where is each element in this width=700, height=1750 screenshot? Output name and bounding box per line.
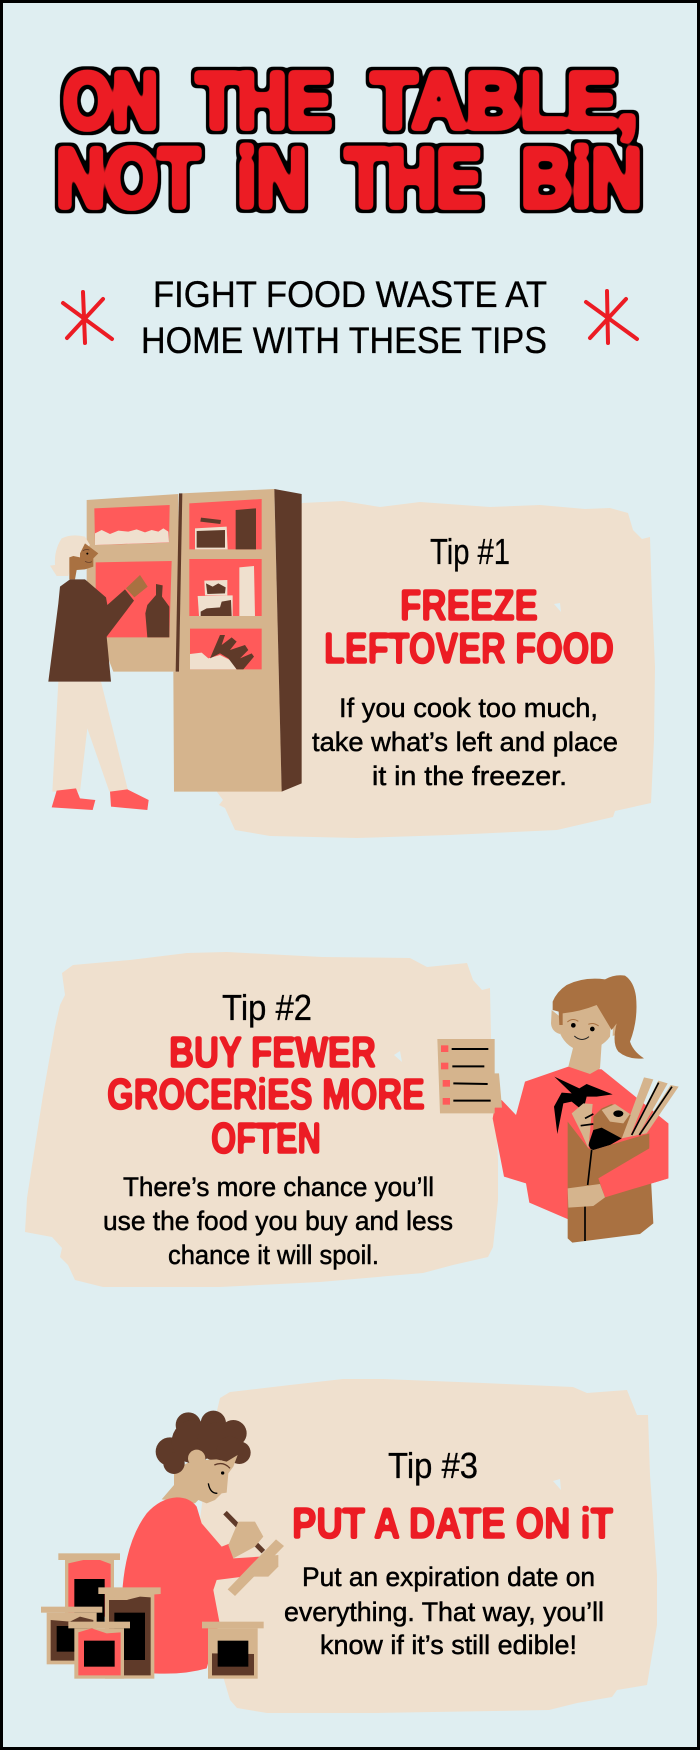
tip 1 heading: FREEZE (400, 581, 538, 630)
tip 3 heading: PUT A DATE ON iT (292, 1499, 613, 1548)
tip 2 body text: There’s more chance you’ll (123, 1172, 434, 1202)
tip 1 body text: it in the freezer. (372, 761, 567, 791)
tip 1 heading: LEFTOVER FOOD (324, 624, 614, 673)
tip 1 body text: take what’s left and place (312, 727, 618, 757)
groceries (572, 1077, 679, 1151)
title: THE (196, 56, 332, 145)
tip 2 body text (103, 1172, 453, 1270)
tip 3 label: Tip #3 (388, 1445, 478, 1486)
illustration: woman at fridge (48, 489, 302, 810)
title: ON (63, 56, 158, 145)
decorative notch: tip 1 (554, 603, 561, 612)
tip 1 heading (324, 581, 614, 673)
illustration: woman with grocery bag and list (437, 975, 679, 1243)
icon: right red asterisk (586, 291, 637, 343)
title (56, 56, 642, 225)
panel: tip 2 background (25, 952, 498, 1287)
head (551, 975, 644, 1074)
tip 2 heading: GROCERiES MORE (107, 1070, 425, 1119)
tip 3 body text: everything. That way, you’ll (284, 1597, 604, 1627)
tip 2 label: Tip #2 (222, 987, 312, 1028)
icon: left red asterisk (63, 292, 112, 343)
fridge (87, 489, 302, 792)
jar: front right (202, 1622, 264, 1679)
panel: tip 3 text (284, 1445, 613, 1660)
tip 1 body text: If you cook too much, (339, 693, 598, 723)
woman (123, 1411, 284, 1674)
title: BiN (521, 131, 642, 225)
illustration: woman labelling jars (41, 1411, 284, 1679)
paper bag (568, 1122, 668, 1243)
tip 3 body text: Put an expiration date on (302, 1562, 595, 1592)
jar: front left (41, 1607, 102, 1664)
jar: back left (58, 1553, 120, 1622)
title: NOT (56, 131, 200, 225)
jar: front centre (68, 1622, 130, 1679)
tip 3 body text: know if it’s still edible! (320, 1630, 577, 1660)
subtitle: HOME WITH THESE TIPS (141, 320, 547, 361)
panel: tip 3 background (200, 1379, 657, 1713)
woman (48, 535, 149, 810)
title: TABLE, (371, 56, 638, 145)
panel: tip 1 background (217, 501, 655, 838)
sweater (493, 1067, 668, 1219)
decorative notch: tip 2 (394, 1051, 402, 1062)
subtitle: FIGHT FOOD WASTE AT (153, 274, 547, 315)
tip 1 body text (312, 693, 618, 791)
title: iN (237, 131, 307, 225)
tip 2 body text: chance it will spoil. (168, 1240, 379, 1270)
checklist (437, 1039, 502, 1113)
tip 1 label: Tip #1 (430, 531, 510, 572)
tip 2 body text: use the food you buy and less (103, 1206, 453, 1236)
tip 3 body text (284, 1562, 604, 1660)
subtitle (141, 274, 547, 361)
panel: tip 2 text (103, 987, 453, 1270)
panel: tip 1 text (312, 531, 618, 791)
scarf (554, 1077, 613, 1134)
jar: back right (98, 1587, 161, 1679)
tip 2 heading: OFTEN (211, 1114, 321, 1163)
tip 2 heading (107, 1028, 425, 1163)
title: THE (345, 131, 482, 225)
decorative notch: tip 3 (553, 1479, 561, 1490)
tip 2 heading: BUY FEWER (169, 1028, 376, 1077)
